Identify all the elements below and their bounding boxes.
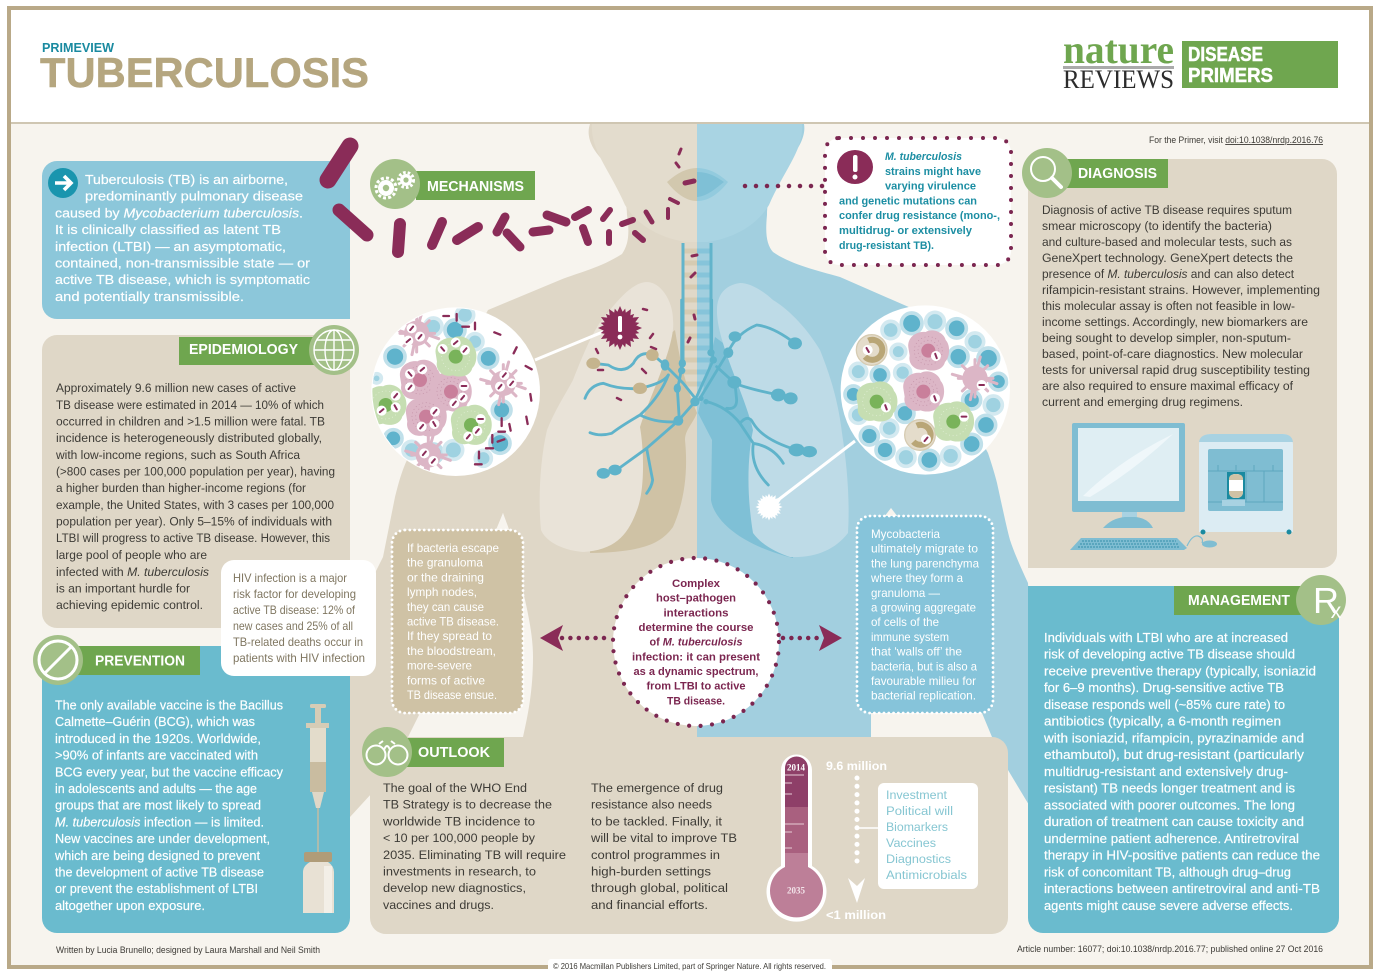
panel: outlook: to be tackled. Finally, it — [591, 814, 723, 828]
text box: spread of bacteria: active TB disease. — [407, 616, 499, 628]
panel: prevention: which are being designed to prevent — [54, 848, 260, 863]
arrow: toward latent infection — [783, 625, 842, 651]
heading: diagnosis: DIAGNOSIS — [1078, 166, 1157, 182]
text box: spread of bacteria: or the draining — [407, 571, 484, 584]
panel: prevention: in adolescents and adults — the age — [55, 781, 257, 796]
list: strategy pillars: Antimicrobials — [886, 868, 967, 882]
trachea — [682, 242, 712, 402]
panel: diagnosis: based, point-of-care diagnostics. New molecular — [1042, 347, 1303, 361]
icon: syringe — [306, 704, 329, 852]
right magnified circle: granuloma — [841, 305, 1010, 475]
text box: granuloma: of cells of the — [871, 616, 939, 629]
heading: management: MANAGEMENT — [1188, 593, 1290, 609]
panel: epidemiology: is an important hurdle for — [56, 582, 190, 596]
panel: diagnosis: current and emerging drug regimens. — [1042, 395, 1243, 409]
icon: white burst — [754, 492, 784, 522]
panel: intro: infection (LTBI) — an asymptomatic, — [55, 239, 286, 254]
heading: epidemiology: EPIDEMIOLOGY — [189, 342, 298, 358]
callout: virulence: multidrug- or extensively — [839, 225, 973, 237]
panel: management: receive preventive therapy (typically, isoniazid — [1044, 664, 1316, 678]
icon: vial — [303, 852, 334, 913]
label: 9.6 million: 9.6 million — [826, 759, 887, 773]
text box: granuloma: a growing aggregate — [871, 602, 976, 614]
panel: epidemiology: occurred in children and >1.5 million were fatal. TB — [56, 414, 325, 428]
panel: epidemiology: a higher burden than higher-income regions (for — [56, 481, 306, 495]
list: strategy pillars: Biomarkers — [886, 820, 948, 834]
callout: virulence: M. tuberculosis — [885, 151, 962, 163]
callout: host-pathogen oval: of M. tuberculosis — [650, 637, 742, 649]
panel: epidemiology: (>800 cases per 100,000 population per year), having — [56, 464, 335, 478]
icon: exclamation — [837, 150, 873, 184]
panel: epidemiology: example, the United States, with 3 cases per 100,000 — [56, 498, 334, 512]
panel: diagnosis: rifampicin-resistant strains. However, implementing — [1042, 283, 1320, 297]
panel: outlook: The goal of the WHO End — [383, 781, 527, 795]
logo: Nature Reviews Disease Primers — [1063, 27, 1338, 94]
panel: epidemiology: large pool of people who are — [56, 548, 207, 562]
heading: management: R — [1313, 580, 1339, 621]
icon: maroon alert burst — [596, 304, 644, 352]
heading: mechanisms — [370, 159, 535, 209]
text box: granuloma: ultimately migrate to — [871, 543, 978, 556]
panel: prevention: altogether upon exposure. — [55, 898, 205, 913]
text box: spread of bacteria: the bloodstream, — [407, 645, 496, 658]
text box: granuloma: bacteria, but is also a — [871, 660, 978, 673]
callout: host-pathogen oval — [613, 558, 779, 726]
panel: management: risk of developing active TB disease should — [1044, 647, 1295, 662]
text box: granuloma: where they form a — [870, 572, 964, 585]
label: below 1 million: <1 million — [826, 908, 886, 922]
text box: spread of bacteria: TB disease ensue. — [407, 689, 497, 702]
text box: spread of bacteria: more-severe — [407, 660, 472, 673]
text box: spread of bacteria — [392, 513, 523, 713]
panel: epidemiology — [42, 325, 359, 628]
heading: mechanisms: MECHANISMS — [427, 179, 524, 195]
text box: granuloma: the lung parenchyma — [871, 557, 980, 570]
panel: outlook: control programmes in — [591, 848, 720, 862]
panel: diagnosis: are also required to ensure maximal efficacy of — [1042, 379, 1294, 393]
panel: management: ethambutol), but drug-resistant (particularly — [1044, 747, 1305, 762]
callout: HIV: patients with HIV infection — [233, 652, 365, 665]
panel: diagnosis: GeneXpert technology. GeneXpert detects the — [1042, 251, 1293, 265]
logo: Nature Reviews Disease Primers: PRIMERS — [1188, 65, 1273, 87]
panel: outlook: develop new diagnostics, — [383, 881, 526, 895]
panel: epidemiology: infected with M. tuberculosis — [56, 565, 209, 579]
panel: epidemiology: LTBI will progress to active TB disease. However, this — [56, 531, 330, 545]
pointer: burst to left circle — [535, 331, 605, 360]
panel: epidemiology: with low-income regions, such as South Africa — [55, 448, 300, 462]
article reference: Article number: 16077; doi:10.1038/nrdp.2016.77; published online 27 Oct 2016 — [1017, 944, 1323, 954]
panel: intro: active TB disease, which is symptomatic — [55, 272, 311, 287]
text box: granuloma — [857, 508, 993, 713]
heading: diagnosis — [1022, 148, 1168, 198]
chart: thermometer: 2014 — [787, 762, 806, 772]
heading: epidemiology — [179, 325, 359, 375]
panel: prevention: The only available vaccine is the Bacillus — [55, 698, 283, 712]
panel: intro: contained, non-transmissible state — or — [55, 256, 311, 270]
heading: outlook — [362, 727, 504, 777]
text box: spread of bacteria: they can cause — [407, 601, 484, 614]
panel: outlook: worldwide TB incidence to — [382, 814, 535, 828]
panel: management: duration of treatment can cause toxicity and — [1044, 814, 1304, 829]
heading: management — [1174, 575, 1346, 625]
panel: intro: and potentially transmissible. — [55, 289, 244, 304]
panel: intro: caused by Mycobacterium tuberculosis . — [55, 205, 303, 220]
panel: management: Individuals with LTBI who are at increased — [1044, 630, 1288, 645]
panel: prevention: M. tuberculosis infection — is limited. — [55, 814, 264, 829]
panel: intro: It is clinically classified as latent TB — [55, 222, 281, 237]
list: strategy pillars: Vaccines — [886, 836, 936, 850]
panel: prevention — [33, 635, 350, 933]
callout: host-pathogen oval: determine the course — [638, 622, 754, 634]
callout: virulence — [745, 138, 1011, 265]
callout: host-pathogen oval: interactions — [664, 607, 728, 619]
list: strategy pillars: Diagnostics — [886, 852, 951, 866]
panel: outlook: 2035. Eliminating TB will require — [383, 848, 566, 862]
right lung — [698, 283, 849, 558]
body: blue right half — [697, 124, 1040, 815]
panel: prevention: New vaccines are under development, — [55, 831, 270, 846]
panel: diagnosis: this molecular assay is often not feasible in low- — [1042, 299, 1295, 313]
panel: outlook: resistance also needs — [591, 798, 712, 812]
human body silhouette — [340, 124, 1040, 830]
panel: management: risk of concomitant TB, although drug–drug — [1044, 864, 1291, 880]
panel: epidemiology: Approximately 9.6 million new cases of active — [56, 381, 296, 395]
arrow: incidence decline — [848, 778, 880, 903]
panel: diagnosis: and culture-based and molecular tests, such as — [1042, 235, 1292, 249]
callout: host-pathogen oval: host–pathogen — [656, 593, 736, 605]
callout: HIV: HIV infection is a major — [233, 572, 347, 585]
icon: computer — [1070, 423, 1217, 550]
panel: management: undermine patient adherence. Antiretroviral — [1044, 831, 1299, 846]
logo: Nature Reviews Disease Primers: nature — [1063, 27, 1174, 72]
text box: spread of bacteria: the granuloma — [407, 557, 484, 570]
heading: outlook: OUTLOOK — [418, 745, 491, 761]
panel: outlook: TB Strategy is to decrease the — [383, 798, 552, 812]
panel: outlook: high-burden settings — [591, 864, 711, 878]
left magnified circle: bacterial dissemination — [366, 306, 540, 476]
list: strategy pillars: Investment — [886, 788, 948, 802]
face shading — [592, 124, 802, 243]
panel: management: with isoniazid, rifampicin, pyrazinamide and — [1043, 730, 1304, 746]
panel: outlook: will be vital to improve TB — [590, 831, 737, 845]
panel: intro: predominantly pulmonary disease — [85, 189, 303, 204]
arrow: toward active disease — [540, 625, 612, 651]
list: strategy pillars — [878, 783, 978, 889]
panel: outlook: vaccines and drugs. — [383, 898, 494, 912]
heading: prevention: PREVENTION — [95, 654, 185, 670]
panel: management: for 6–9 months). Drug-sensitive active TB — [1044, 680, 1284, 695]
panel: epidemiology: achieving epidemic control. — [56, 598, 203, 612]
primer reference: For the Primer, visit doi:10.1038/nrdp.2016.76 — [1149, 135, 1323, 145]
callout: host-pathogen oval: Complex — [672, 578, 721, 590]
callout: HIV: TB-related deaths occur in — [233, 636, 363, 649]
text box: spread of bacteria: forms of active — [407, 674, 485, 687]
panel: outlook — [362, 727, 1008, 934]
panel: management — [1028, 575, 1346, 933]
callout: HIV: new cases and 25% of all — [233, 620, 353, 633]
panel: management: antibiotics (typically, a 6-month regimen — [1044, 714, 1281, 729]
text box: granuloma: bacterial replication. — [871, 690, 976, 703]
callout: virulence: varying virulence — [885, 180, 976, 192]
body: tan left half — [340, 124, 697, 830]
left lung — [540, 282, 697, 553]
panel: prevention: BCG every year, but the vaccine efficacy — [55, 764, 284, 779]
callout: virulence: drug-resistant TB). — [839, 240, 934, 252]
heading: management: x — [1331, 600, 1342, 623]
panel: outlook: < 10 per 100,000 people by — [383, 831, 536, 845]
logo: Nature Reviews Disease Primers: REVIEWS — [1063, 65, 1174, 94]
panel: management: agents might cause severe adverse effects. — [1044, 898, 1293, 913]
callout: host-pathogen oval: TB disease. — [667, 695, 725, 707]
icon: GeneXpert machine — [1199, 434, 1293, 534]
icon: gears — [376, 172, 414, 198]
panel: prevention: >90% of infants are vaccinated with — [55, 748, 258, 763]
airborne bacteria trail — [328, 146, 697, 400]
panel: diagnosis: smear microscopy (to identify the bacteria) — [1042, 219, 1272, 233]
callout: virulence: and genetic mutations can — [839, 196, 977, 208]
panel: outlook: through global, political — [591, 881, 728, 895]
list: strategy pillars: Political will — [886, 804, 953, 818]
title block: TUBERCULOSIS — [40, 49, 369, 96]
text box: spread of bacteria: If they spread to — [407, 630, 492, 643]
panel: diagnosis: Diagnosis of active TB disease requires sputum — [1042, 203, 1292, 217]
panel: diagnosis: being sought to develop simpler, non-sputum- — [1042, 331, 1291, 345]
chart: thermometer — [766, 754, 826, 922]
panel: outlook: and financial efforts. — [591, 898, 708, 912]
panel: prevention: groups that are most likely to spread — [55, 798, 261, 813]
logo: Nature Reviews Disease Primers: DISEASE — [1188, 44, 1263, 66]
panel: diagnosis — [1022, 148, 1337, 568]
callout: virulence: strains might have — [885, 166, 981, 178]
icon: arrow — [48, 168, 78, 198]
copyright: © 2016 Macmillan Publishers Limited, part of Springer Nature. All rights reserved. — [553, 961, 826, 971]
panel: management: therapy in HIV-positive patients can reduce the — [1044, 848, 1320, 863]
callout: virulence: confer drug resistance (mono-, — [839, 210, 1000, 222]
panel: prevention: Calmette–Guérin (BCG), which was — [55, 714, 255, 729]
text box: granuloma: granuloma — — [871, 587, 940, 600]
panel: management: disease responds well (~85% cure rate) to — [1044, 697, 1285, 712]
panel: diagnosis: tests for universal rapid drug susceptibility testing — [1042, 363, 1310, 377]
chart: thermometer: 2035 — [787, 886, 806, 896]
credits: Written by Lucia Brunello; designed by Laura Marshall and Neil Smith — [56, 945, 320, 955]
panel: outlook: The emergence of drug — [591, 781, 723, 795]
text box: granuloma: immune system — [871, 631, 949, 644]
panel: intro — [42, 161, 350, 319]
bronchi tree — [585, 300, 817, 493]
callout: HIV — [221, 560, 376, 676]
callout: host-pathogen oval: as a dynamic spectrum, — [634, 666, 758, 678]
heading: prevention — [33, 635, 200, 685]
panel: prevention: or prevent the establishment of LTBI — [55, 881, 258, 896]
text box: granuloma: that ‘walls off’ the — [871, 646, 962, 659]
callout: HIV: active TB disease: 12% of — [233, 604, 356, 617]
panel: management: interactions between antiretroviral and anti-TB — [1044, 881, 1320, 896]
text box: spread of bacteria: If bacteria escape — [407, 542, 499, 555]
panel: outlook: investments in research, to — [383, 864, 536, 878]
callout: host-pathogen oval: from LTBI to active — [646, 681, 746, 693]
panel: intro: Tuberculosis (TB) is an airborne, — [85, 172, 288, 187]
panel: management: resistant) TB needs longer treatment and is — [1044, 781, 1295, 796]
mouth — [667, 168, 728, 201]
text box: spread of bacteria: lymph nodes, — [407, 586, 477, 599]
panel: prevention: the development of active TB disease — [55, 864, 264, 880]
pointer: burst to right circle — [769, 441, 855, 507]
panel: epidemiology: population per year). Only 5–15% of individuals with — [56, 514, 332, 528]
text box: granuloma: favourable milieu for — [871, 675, 976, 688]
panel: prevention: introduced in the 1920s. Worldwide, — [55, 731, 261, 746]
text box: granuloma: Mycobacteria — [871, 528, 941, 541]
panel: diagnosis: income settings. Accordingly, new biomarkers are — [1042, 315, 1308, 329]
callout: HIV: risk factor for developing — [233, 588, 356, 601]
panel: management: multidrug-resistant and extensively drug- — [1044, 764, 1288, 779]
panel: management: associated with poorer outcomes. The long — [1044, 798, 1295, 812]
panel: diagnosis: presence of M. tuberculosis and can also detect — [1042, 267, 1295, 281]
title block: PRIMEVIEW — [42, 41, 114, 55]
panel: epidemiology: TB disease were estimated in 2014 — 10% of which — [56, 398, 324, 412]
panel: epidemiology: incidence is heterogeneously distributed globally, — [56, 431, 322, 445]
callout: host-pathogen oval: infection: it can present — [632, 651, 760, 663]
